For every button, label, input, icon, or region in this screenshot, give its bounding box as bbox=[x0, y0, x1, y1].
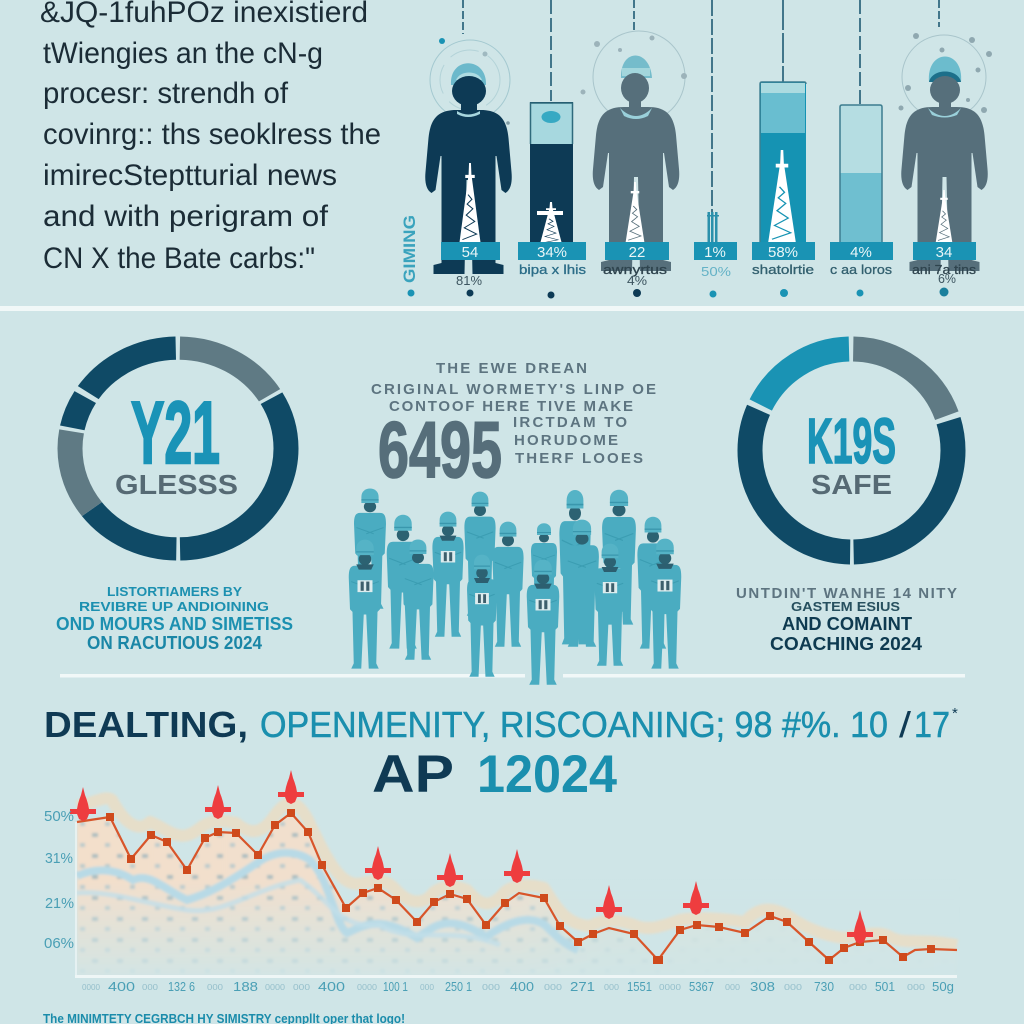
x axis labels: 730 bbox=[814, 979, 834, 994]
figure 1 navy bbox=[425, 38, 512, 274]
right donut caption bbox=[736, 585, 957, 654]
donut chart: right bbox=[750, 349, 953, 552]
x axis labels: 000 bbox=[142, 983, 159, 992]
figure 7 grey bbox=[898, 33, 992, 271]
x axis labels: 400 bbox=[318, 979, 345, 994]
centre statement: THERF LOOES bbox=[515, 450, 643, 467]
value labels: 34% bbox=[537, 244, 567, 261]
left donut label: GLESSS bbox=[115, 469, 238, 500]
left donut caption bbox=[56, 584, 293, 653]
y axis labels: 06% bbox=[44, 935, 74, 952]
value labels: 1% bbox=[704, 244, 726, 261]
bar 5 teal bbox=[760, 82, 806, 245]
heading line: OPENMENITY, RISCOANING; 98 #%. 10 bbox=[260, 704, 888, 745]
x axis labels: 0000 bbox=[357, 983, 378, 992]
pale blue waves bbox=[77, 853, 578, 950]
right donut caption: UNTDIN'T WANHE 14 NITY bbox=[736, 585, 957, 602]
x axis labels: 000 bbox=[604, 983, 620, 992]
top divider bbox=[0, 306, 1024, 311]
y axis labels bbox=[44, 808, 74, 952]
centre statement: 6495 bbox=[378, 405, 502, 494]
heading line: * bbox=[952, 705, 958, 722]
heading line: 17 bbox=[914, 704, 950, 745]
intro text block: imirecSteptturial news bbox=[43, 159, 337, 192]
x axis labels: 1551 bbox=[627, 979, 652, 994]
heading year: 12024 bbox=[477, 745, 617, 804]
right donut value: K19S bbox=[807, 405, 896, 477]
centre statement: CONTOOF HERE TIVE MAKE bbox=[389, 398, 633, 415]
value labels: 22 bbox=[629, 244, 645, 261]
data markers bbox=[106, 809, 935, 964]
right donut caption: AND COMAINT bbox=[782, 614, 912, 634]
captions under bars: 50% bbox=[701, 264, 731, 279]
intro text block: covinrg:: ths seoklress the bbox=[43, 118, 381, 151]
item 4 ticks bbox=[707, 212, 719, 242]
trend line bbox=[77, 813, 957, 960]
x axis labels: 000 bbox=[907, 983, 926, 992]
x axis labels: 000 bbox=[784, 983, 803, 992]
right donut label: SAFE bbox=[811, 469, 892, 500]
x axis labels: 000 bbox=[482, 983, 501, 992]
captions under bars: 81% bbox=[456, 273, 482, 288]
captions under bars: awnyrtus bbox=[603, 262, 668, 277]
left donut caption: OND MOURS AND SIMETISS bbox=[56, 614, 293, 634]
crowd of people bbox=[349, 489, 681, 685]
left donut caption: LISTORTIAMERS BY bbox=[107, 584, 242, 599]
captions under bars: 4% bbox=[627, 273, 647, 288]
value labels: 54 bbox=[462, 244, 478, 261]
x axis labels: 0000 bbox=[659, 983, 682, 992]
captions under bars: c aa loros bbox=[830, 262, 893, 277]
x axis labels: 5367 bbox=[689, 979, 714, 994]
hanging dashed lines bbox=[463, 0, 939, 212]
vertical rotated label: GIMING bbox=[400, 215, 419, 283]
x axis labels: 400 bbox=[108, 979, 135, 994]
left donut caption: ON RACUTIOUS 2024 bbox=[87, 633, 262, 653]
captions under bars: bipa x lhis bbox=[519, 262, 587, 277]
x axis labels: 000 bbox=[725, 983, 741, 992]
x axis labels: 000 bbox=[293, 983, 311, 992]
intro text block bbox=[40, 0, 381, 275]
captions under bars: ani 7a tins bbox=[912, 262, 977, 277]
x axis labels bbox=[82, 979, 954, 994]
marker dots bbox=[408, 288, 948, 298]
x axis labels: 000 bbox=[849, 983, 868, 992]
y axis labels: 21% bbox=[45, 895, 74, 912]
right donut caption: GASTEM ESIUS bbox=[791, 599, 900, 614]
left donut caption: REVIBRE UP ANDIOINING bbox=[79, 599, 269, 614]
donut chart: left bbox=[70, 348, 286, 549]
centre statement bbox=[371, 360, 656, 494]
centre statement: IRCTDAM TO bbox=[513, 414, 627, 431]
centre statement: CRIGINAL WORMETY'S LINP OE bbox=[371, 381, 656, 398]
heading line: / bbox=[899, 704, 911, 745]
x axis labels: 501 bbox=[875, 979, 895, 994]
y axis labels: 50% bbox=[44, 808, 74, 825]
x axis labels: 000 bbox=[207, 983, 224, 992]
centre statement: THE EWE DREAN bbox=[436, 360, 587, 377]
heading year bbox=[372, 745, 617, 804]
value labels: 58% bbox=[768, 244, 798, 261]
tan band bbox=[77, 798, 957, 945]
red alert markers bbox=[70, 770, 873, 944]
value labels: 4% bbox=[850, 244, 872, 261]
x axis labels: 50g bbox=[932, 979, 954, 994]
heading year: AP bbox=[372, 745, 454, 804]
value labels: 34 bbox=[936, 244, 952, 261]
line chart bbox=[44, 770, 957, 994]
panel: figures and bars bbox=[400, 0, 992, 298]
value labels bbox=[441, 242, 976, 261]
x axis labels: 400 bbox=[510, 979, 534, 994]
x axis labels: 188 bbox=[233, 979, 258, 994]
x axis labels: 0000 bbox=[265, 983, 286, 992]
captions under bars: 6% bbox=[938, 271, 956, 286]
chart area bbox=[77, 798, 957, 977]
x axis labels: 250 1 bbox=[445, 979, 472, 994]
y axis labels: 31% bbox=[45, 850, 73, 867]
right donut caption: COACHING 2024 bbox=[770, 634, 922, 654]
captions under bars bbox=[456, 262, 977, 288]
x axis labels: 308 bbox=[750, 979, 775, 994]
figure 3 grey bbox=[580, 31, 687, 271]
captions under bars: shatolrtie bbox=[752, 262, 814, 277]
intro text block: procesr: strendh of bbox=[43, 77, 289, 110]
intro text block: CN X the Bate carbs:" bbox=[43, 242, 315, 275]
x axis labels: 132 6 bbox=[168, 979, 195, 994]
left donut value: Y21 bbox=[131, 383, 220, 482]
axes bbox=[75, 822, 957, 978]
x axis labels: 000 bbox=[420, 983, 435, 992]
x axis labels: 0000 bbox=[82, 983, 101, 992]
centre statement: HORUDOME bbox=[514, 432, 618, 449]
bar 6 light bbox=[840, 105, 882, 245]
intro text block: tWiengies an the cN-g bbox=[43, 37, 323, 70]
bar 2 navy bbox=[530, 102, 573, 245]
heading line: DEALTING, bbox=[44, 704, 248, 745]
bottom divider bbox=[60, 674, 965, 678]
x axis labels: 000 bbox=[544, 983, 563, 992]
intro text block: and with perigram of bbox=[43, 200, 329, 233]
x axis labels: 100 1 bbox=[383, 979, 408, 994]
x axis labels: 271 bbox=[570, 979, 595, 994]
